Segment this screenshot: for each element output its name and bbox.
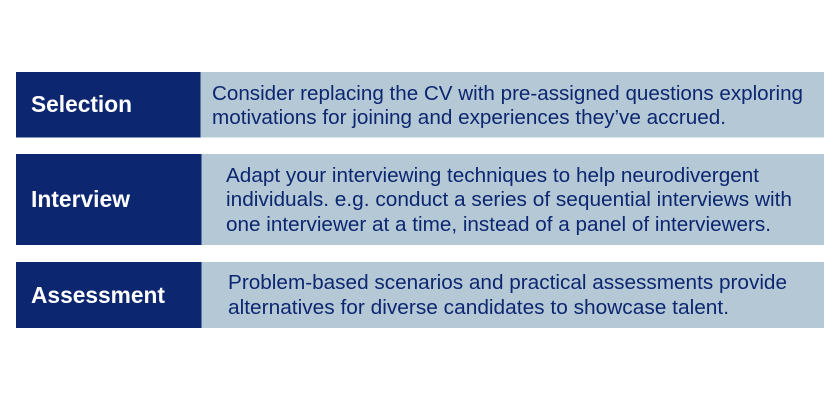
selection description xyxy=(212,83,803,129)
assessment description: Problem-based scenarios and practical assessments provide xyxy=(228,272,787,294)
selection description: motivations for joining and experiences they’ve accrued. xyxy=(212,107,726,129)
heading: selection: Selection xyxy=(31,91,132,117)
interview description: individuals. e.g. conduct a series of sequential interviews with xyxy=(226,189,792,211)
interview text panel xyxy=(201,154,824,245)
heading: assessment: Assessment xyxy=(31,282,165,308)
assessment description: alternatives for diverse candidates to showcase talent. xyxy=(228,297,729,319)
assessment text panel xyxy=(201,262,824,328)
heading: interview: Interview xyxy=(31,186,130,212)
assessment description xyxy=(228,272,787,319)
row: interview xyxy=(16,154,824,245)
interview label box xyxy=(16,154,202,245)
selection label box xyxy=(16,72,200,138)
row: selection xyxy=(16,72,824,138)
selection text panel xyxy=(200,72,824,138)
selection description: Consider replacing the CV with pre-assigned questions exploring xyxy=(212,83,803,105)
row: assessment xyxy=(16,262,824,328)
assessment label box xyxy=(16,262,202,328)
interview description: Adapt your interviewing techniques to help neurodivergent xyxy=(226,165,759,187)
interview description: one interviewer at a time, instead of a panel of interviewers. xyxy=(226,214,771,236)
interview description xyxy=(226,165,792,236)
